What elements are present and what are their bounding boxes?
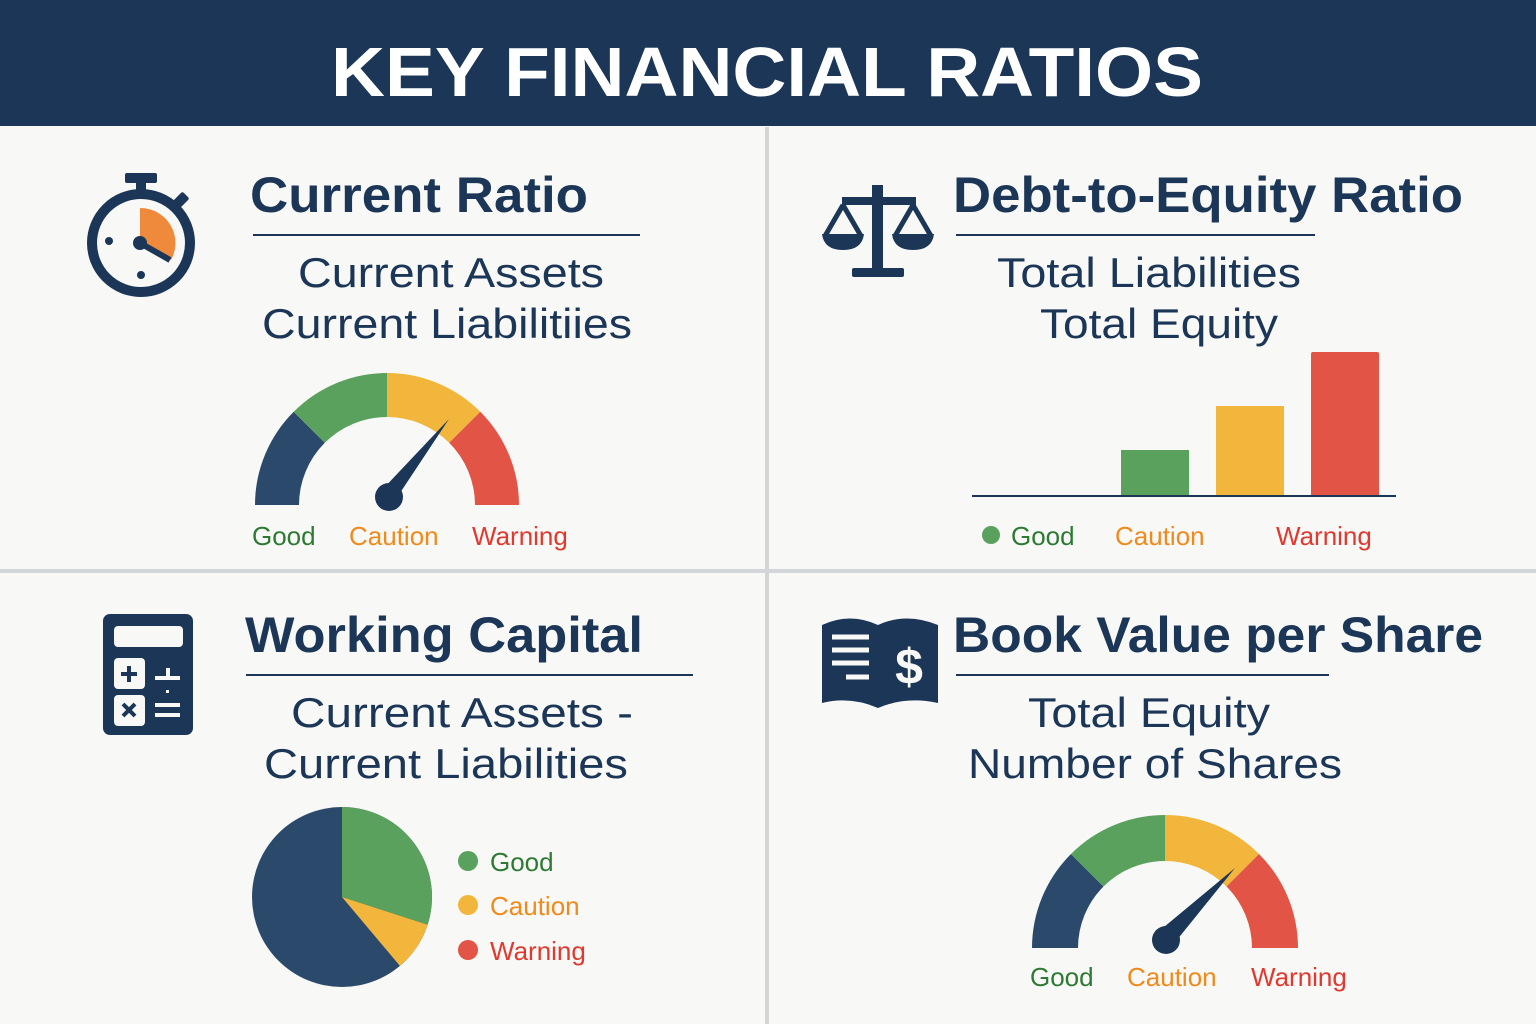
legend: Warning xyxy=(490,936,586,966)
formula: debt-to-equity xyxy=(997,249,1301,347)
gauge chart xyxy=(1030,815,1347,992)
icon: scale xyxy=(822,185,934,277)
gauge chart: Caution xyxy=(1127,962,1217,992)
legend xyxy=(982,521,1372,551)
legend labels: Good xyxy=(1030,962,1094,992)
heading: current ratio: Current Ratio xyxy=(250,167,588,223)
gauge chart: Warning xyxy=(1251,962,1347,992)
panel: debt-to-equity xyxy=(822,167,1463,551)
legend labels: Good xyxy=(252,521,316,551)
legend: Caution xyxy=(1115,521,1205,551)
gauge chart: Warning xyxy=(472,521,568,551)
formula: book value: Total Equity xyxy=(1028,689,1270,736)
bar chart xyxy=(972,352,1396,497)
icon: stopwatch xyxy=(92,173,190,292)
gauge needle xyxy=(375,419,449,511)
formula: working capital xyxy=(264,689,633,787)
gauge chart: Caution xyxy=(349,521,439,551)
panel: book value per share xyxy=(822,607,1483,992)
formula: working capital: Current Liabilities xyxy=(264,740,628,787)
formula: debt-to-equity: Total Equity xyxy=(1040,300,1278,347)
legend: Good xyxy=(1011,521,1075,551)
heading: book value per share: Book Value per Share xyxy=(953,607,1483,663)
heading: working capital: Working Capital xyxy=(245,607,643,663)
panel: working capital xyxy=(103,607,693,987)
legend: Good xyxy=(490,847,554,877)
gauge needle xyxy=(1152,868,1235,954)
icon: book with dollar xyxy=(822,618,938,708)
formula: current ratio: Current Liabilitiies xyxy=(262,300,632,347)
pie chart xyxy=(252,807,432,987)
legend xyxy=(458,847,586,966)
icon: book with dollar: $ xyxy=(895,639,923,695)
formula: debt-to-equity: Total Liabilities xyxy=(997,249,1301,296)
formula: book value xyxy=(968,689,1342,787)
panel: current ratio xyxy=(92,167,640,551)
heading: debt-to-equity: Debt-to-Equity Ratio xyxy=(953,167,1463,223)
formula: working capital: Current Assets - xyxy=(291,689,633,736)
formula: book value: Number of Shares xyxy=(968,740,1342,787)
icon: calculator xyxy=(103,614,193,735)
legend: Caution xyxy=(490,891,580,921)
gauge chart xyxy=(252,373,568,551)
formula: current ratio: Current Assets xyxy=(298,249,604,296)
formula: current ratio xyxy=(262,249,632,347)
title: KEY FINANCIAL RATIOS xyxy=(331,33,1203,111)
header banner xyxy=(0,0,1536,126)
legend: Warning xyxy=(1276,521,1372,551)
